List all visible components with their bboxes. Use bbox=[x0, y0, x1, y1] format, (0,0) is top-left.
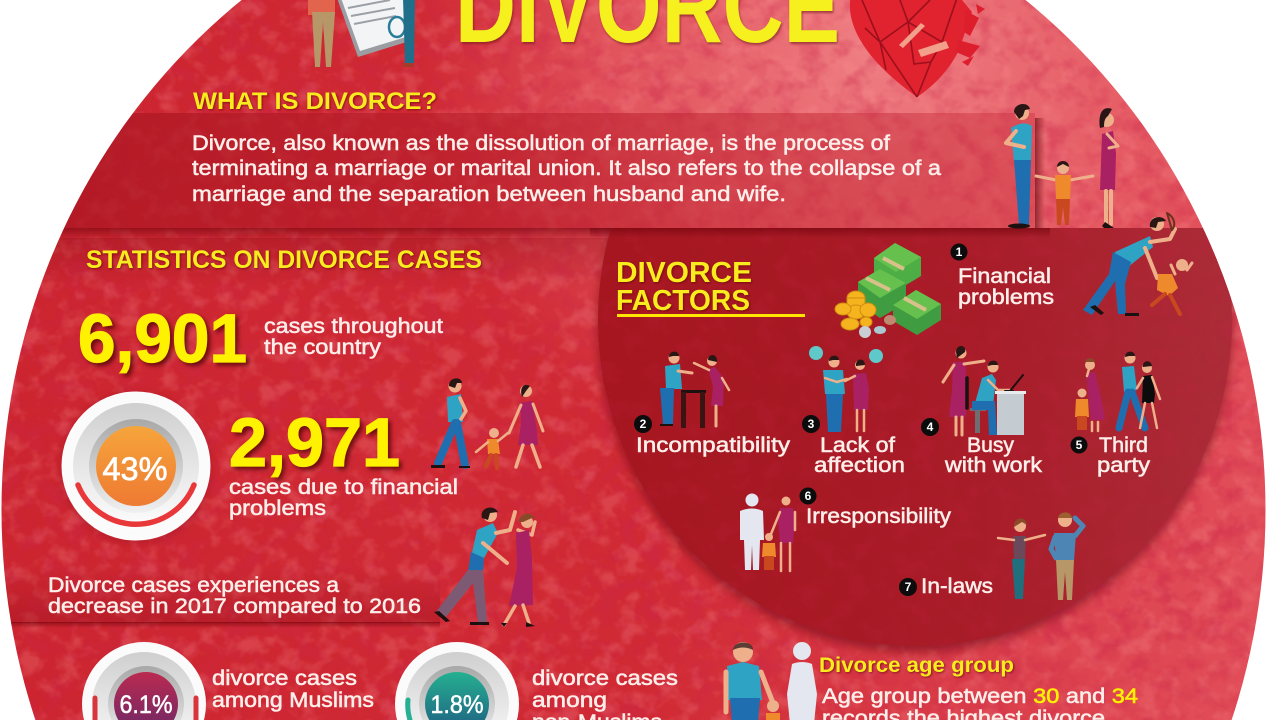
factor 2: incompatibility: Incompatibility bbox=[636, 434, 791, 457]
text block: decrease statement: Divorce cases experiences a bbox=[48, 574, 339, 597]
factor 1: financial problems: 1 bbox=[956, 245, 963, 259]
heading: divorce factors: DIVORCE bbox=[616, 257, 752, 289]
factor 3: lack of affection: Lack of bbox=[820, 434, 895, 457]
factor 4: busy with work bbox=[921, 346, 1043, 477]
text: non-Muslim cases bbox=[532, 667, 678, 720]
factor 4: busy with work: with work bbox=[944, 454, 1043, 477]
factor 1: financial problems: problems bbox=[958, 286, 1054, 309]
ring: 43 percent bbox=[62, 392, 210, 542]
factor 7: in-laws bbox=[899, 512, 1083, 600]
icon: money stacks and coins bbox=[835, 243, 941, 338]
stat: 2,971 cases: 2,971 bbox=[229, 404, 400, 481]
text block: divorce age group bbox=[819, 654, 1138, 720]
heading: what is divorce: WHAT IS DIVORCE? bbox=[193, 88, 437, 115]
stat: 2,971 cases bbox=[229, 404, 458, 520]
text block: divorce definition: Divorce, also known as the dissolution of marriage, is the process of bbox=[192, 132, 890, 155]
heading: divorce factors: FACTORS bbox=[616, 285, 750, 317]
panel: divorce factors background bbox=[590, 228, 1238, 658]
icon: broken heart bbox=[850, 0, 985, 97]
factor 3: lack of affection: affection bbox=[814, 454, 905, 477]
factor 6: irresponsibility: 6 bbox=[805, 489, 812, 503]
factor 5: third party: 5 bbox=[1076, 438, 1083, 452]
ring: 1.8 percent: 1.8% bbox=[430, 691, 484, 719]
factor 2: incompatibility bbox=[634, 352, 791, 457]
stat: 2,971 cases: cases due to financial bbox=[229, 476, 458, 499]
text block: divorce definition: terminating a marriage or marital union. It also refers to the collapse of a bbox=[192, 157, 941, 180]
ring: 43 percent: 43% bbox=[102, 451, 168, 487]
text block: divorce age group: Divorce age group bbox=[819, 654, 1014, 677]
factor 7: in-laws: 7 bbox=[905, 580, 912, 594]
heading: divorce factors bbox=[616, 257, 805, 317]
factor 2: incompatibility: 2 bbox=[640, 417, 647, 431]
factor 1: financial problems: Financial bbox=[958, 265, 1051, 288]
illustration: walking family bbox=[431, 378, 543, 468]
panel: what is divorce background bbox=[47, 113, 1044, 272]
text: non-Muslim cases: divorce cases bbox=[532, 667, 678, 690]
ring: 1.8 percent bbox=[395, 642, 519, 720]
text block: divorce age group: Age group between 30 and 34 bbox=[822, 685, 1138, 708]
illustration: couple with document bbox=[308, 0, 415, 67]
factor 5: third party bbox=[1070, 352, 1160, 477]
text block: divorce definition: marriage and the separation between husband and wife. bbox=[192, 183, 786, 206]
factor 5: third party: Third bbox=[1099, 434, 1148, 457]
ring: 6.1 percent: 6.1% bbox=[120, 691, 172, 719]
ring: 6.1 percent bbox=[82, 642, 206, 720]
factor 6: irresponsibility bbox=[740, 488, 952, 571]
stat: 6,901 cases: the country bbox=[264, 336, 382, 359]
stat: 2,971 cases: problems bbox=[229, 497, 326, 520]
illustration: man pushing woman bbox=[434, 507, 535, 627]
text block: decrease statement: decrease in 2017 compared to 2016 bbox=[48, 595, 421, 618]
text block: decrease statement bbox=[48, 574, 421, 618]
stat: 6,901 cases: 6,901 bbox=[78, 300, 247, 377]
text: non-Muslim cases: among bbox=[532, 689, 607, 712]
factor 4: busy with work: Busy bbox=[967, 434, 1015, 457]
factor 4: busy with work: 4 bbox=[927, 420, 934, 434]
stat: 6,901 cases: cases throughout bbox=[264, 315, 443, 338]
factor 7: in-laws: In-laws bbox=[921, 575, 993, 598]
text: Muslim cases: divorce cases bbox=[212, 667, 357, 690]
factor 5: third party: party bbox=[1097, 454, 1151, 477]
heading: statistics: STATISTICS ON DIVORCE CASES bbox=[86, 246, 482, 274]
text: Muslim cases bbox=[212, 667, 374, 712]
factor 3: lack of affection: 3 bbox=[808, 417, 815, 431]
band: decrease statement background bbox=[6, 586, 440, 627]
illustration: separated family bbox=[1006, 104, 1118, 228]
text block: divorce definition bbox=[192, 132, 941, 206]
illustration: man hitting child bbox=[1083, 213, 1192, 316]
stat: 6,901 cases bbox=[78, 300, 443, 377]
factor 3: lack of affection bbox=[802, 346, 905, 477]
illustration: parents and child bbox=[726, 642, 817, 720]
factor 6: irresponsibility: Irresponsibility bbox=[806, 505, 952, 528]
text: Muslim cases: among Muslims bbox=[212, 689, 374, 712]
factor 1: financial problems bbox=[950, 244, 1054, 309]
